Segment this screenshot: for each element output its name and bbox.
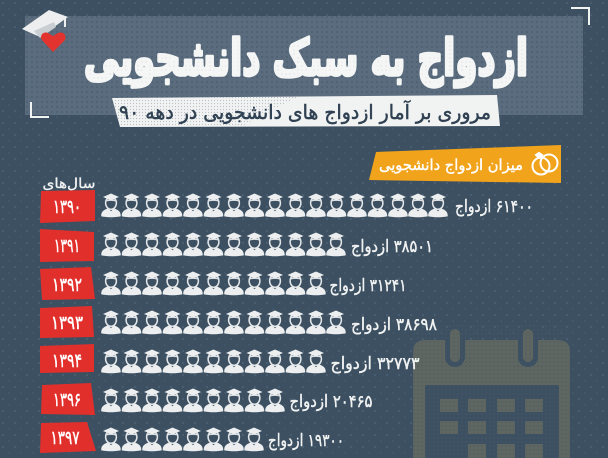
row 1392: ۱۳۹۲ [52, 274, 82, 296]
row 1391 [40, 229, 433, 262]
row 1397: ۱۹۳۰۰ ازدواج [268, 431, 344, 451]
corner bracket top right [571, 8, 589, 25]
icon: rings [532, 153, 558, 174]
row 1393: ۱۳۹۳ [51, 312, 83, 334]
row 1392 [40, 267, 406, 300]
row 1394: ۱۳۹۴ [52, 350, 82, 372]
row 1396: ۱۳۹۶ [53, 389, 81, 411]
header panel [25, 16, 583, 115]
row 1394: ۳۲۷۷۳ ازدواج [330, 354, 420, 374]
row 1393 [40, 306, 437, 338]
row 1390 [40, 190, 533, 223]
calendar watermark icon [413, 325, 570, 458]
row 1396: ۲۰۴۶۵ ازدواج [290, 392, 372, 412]
years column heading: سال‌های [42, 176, 96, 192]
row 1391: ۱۳۹۱ [54, 235, 80, 257]
row 1393: ۳۸۶۹۸ ازدواج [351, 315, 437, 335]
corner bracket bottom left [31, 102, 49, 117]
section banner: student marriage [369, 145, 561, 183]
row 1391: ۳۸۵۰۱ ازدواج [351, 237, 433, 257]
icon: graduation cap with heart [22, 10, 68, 52]
row 1397 [40, 422, 344, 453]
subtitle text: مروری بر آمار ازدواج های دانشجویی در دهه ۹۰ [119, 99, 491, 124]
subtitle strip [112, 95, 500, 127]
row 1394 [40, 344, 420, 374]
row 1396 [41, 383, 372, 415]
row 1390: ۶۱۴۰۰ ازدواج [455, 197, 533, 217]
row 1392: ۳۱۲۴۱ ازدواج [330, 276, 406, 296]
row 1397: ۱۳۹۷ [50, 427, 80, 449]
banner text: میزان ازدواج دانشجویی [379, 156, 523, 175]
row 1390: ۱۳۹۰ [53, 196, 81, 218]
